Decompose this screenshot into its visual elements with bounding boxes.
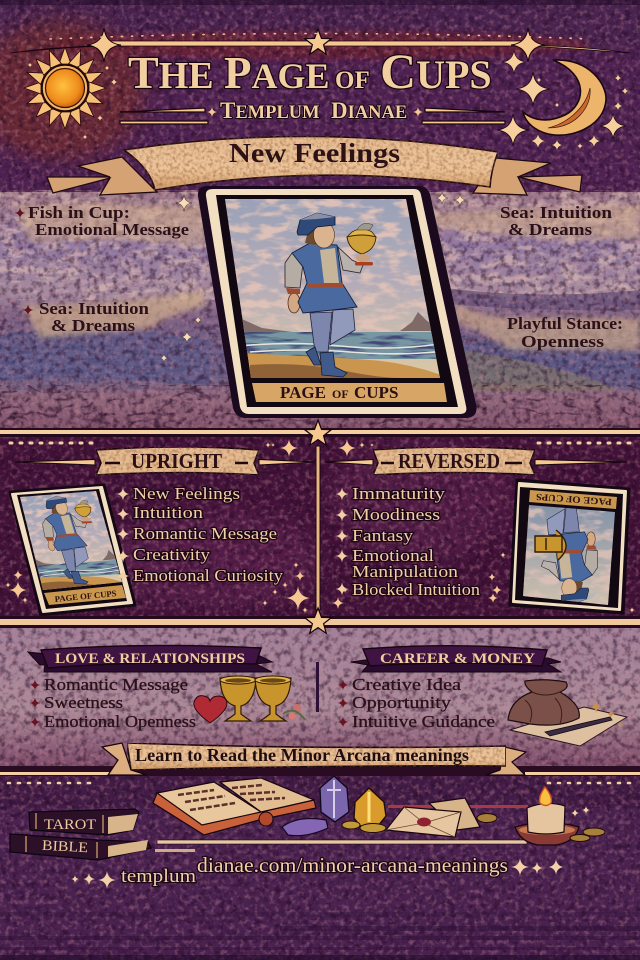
upright list: Emotional Curiosity — [133, 566, 284, 585]
reversed list — [336, 484, 481, 599]
callout: Sea right — [500, 203, 613, 239]
upright tarot card: PAGE OF CUPS — [54, 588, 117, 604]
reversed list: Moodiness — [352, 505, 440, 524]
reversed list: Blocked Intuition — [352, 580, 481, 599]
upright list: Intuition — [133, 503, 204, 522]
career list: Opportunity — [352, 693, 452, 712]
title: HE — [159, 55, 214, 97]
career heading ribbon: CAREER & MONEY — [380, 651, 535, 667]
main tarot card — [198, 186, 477, 418]
reversed list: Fantasy — [352, 526, 414, 545]
reversed list: Immaturity — [352, 484, 446, 503]
love list: Emotional Openness — [44, 712, 196, 731]
link text: url: dianae.com/minor-arcana-meanings — [197, 853, 508, 877]
callout ribbon: right lower — [452, 302, 640, 350]
link text: templum — [71, 866, 196, 889]
reversed heading ribbon — [325, 447, 627, 475]
callout ribbon: left lower — [22, 290, 205, 338]
rule above footer — [0, 766, 640, 783]
icon: sun — [24, 47, 106, 129]
title: C — [380, 43, 416, 99]
rule below upright/reversed section — [0, 608, 640, 633]
centre divider — [316, 446, 320, 610]
book: Bible — [10, 834, 151, 860]
icon: crescent moon — [523, 60, 606, 135]
stars around moon and sun — [27, 50, 629, 151]
top ornamental rule — [10, 28, 630, 62]
upright heading ribbon — [15, 447, 315, 475]
icon: candle — [515, 787, 605, 845]
title: OF — [335, 67, 370, 94]
reversed list: Emotional — [352, 546, 434, 565]
career list: Creative Idea — [352, 675, 462, 694]
callout: Sea right: Sea: Intuition — [500, 203, 613, 222]
career list — [338, 675, 495, 731]
callout: Fish in Cup — [14, 203, 189, 239]
callout: Sea right: & Dreams — [508, 220, 592, 239]
banner text: Learn to Read the Minor Arcana meanings — [135, 745, 469, 765]
card illustration — [225, 199, 440, 378]
book: Tarot — [29, 809, 139, 835]
title: T — [128, 47, 159, 98]
panel: career and money — [338, 646, 627, 746]
title: AGE — [252, 56, 330, 96]
subtitle: Templum Dianae: IANAE — [348, 103, 407, 123]
callout: Playful Stance — [507, 314, 623, 351]
callout: Playful Stance: Playful Stance: — [507, 314, 623, 333]
icon: crystals and gems — [282, 776, 386, 836]
card name plate: OF — [332, 387, 349, 401]
rule above upright/reversed section — [0, 420, 640, 445]
lower divider — [316, 662, 319, 712]
shelf line — [155, 805, 528, 852]
icon: open book — [153, 778, 316, 835]
upright tarot card — [10, 485, 135, 615]
upright list — [116, 484, 284, 585]
reversed list: Manipulation — [352, 562, 459, 581]
callout: Sea left: Sea: Intuition — [39, 299, 150, 318]
card name plate: PAGE — [280, 383, 326, 402]
subtitle: Templum Dianae: T — [220, 98, 235, 123]
subtitle: Templum Dianae: D — [331, 98, 348, 123]
upright list: New Feelings — [133, 484, 240, 503]
banner: Learn to Read — [102, 743, 526, 775]
subtitle: Templum Dianae — [120, 98, 505, 124]
career heading ribbon — [351, 646, 561, 672]
banner text: New Feelings — [229, 138, 400, 168]
callout: Fish in Cup: Fish in Cup: — [28, 203, 130, 222]
reversed tarot card: PAGE OF CUPS — [536, 491, 612, 506]
card name plate: CUPS — [354, 383, 398, 402]
callout ribbon: left upper — [15, 203, 205, 246]
panel: upright — [10, 447, 315, 615]
book: Bible: BIBLE — [42, 838, 88, 856]
callout: Fish in Cup: Emotional Message — [35, 220, 189, 239]
callout: Sea left — [22, 299, 150, 335]
banner: New Feelings — [47, 136, 582, 195]
book: Tarot: TAROT — [44, 817, 96, 833]
icon: coin bag, paper and pen — [508, 680, 627, 746]
love list — [30, 675, 196, 731]
reversed heading ribbon: REVERSED — [398, 449, 500, 473]
upright heading ribbon: UPRIGHT — [131, 449, 222, 473]
love list: Romantic Message — [44, 675, 188, 694]
subtitle: Templum Dianae: EMPLUM — [235, 103, 320, 123]
sparkles in upright/reversed panels — [5, 439, 635, 613]
card name plate — [252, 383, 447, 402]
title: UPS — [416, 52, 492, 97]
callout ribbon: right upper — [433, 205, 640, 240]
callout: Sea left: & Dreams — [51, 316, 135, 335]
icon: envelope and letter — [386, 798, 497, 837]
icon: goblets and heart — [194, 676, 305, 723]
icon: stacked books — [10, 809, 151, 860]
love heading ribbon: LOVE & RELATIONSHIPS — [55, 651, 245, 667]
sparkles around main card — [160, 192, 466, 362]
upright list: Creativity — [133, 545, 211, 564]
panel: reversed — [325, 447, 629, 613]
upright list: Romantic Message — [133, 524, 277, 543]
love list: Sweetness — [44, 693, 123, 712]
love heading ribbon — [28, 645, 272, 672]
reversed tarot card — [510, 480, 629, 613]
title: P — [224, 48, 252, 98]
link text: templum: templum — [121, 866, 196, 887]
career list: Intuitive Guidance — [352, 712, 495, 731]
callout: Playful Stance: Openness — [521, 332, 604, 351]
panel: love and relationships — [28, 645, 305, 731]
